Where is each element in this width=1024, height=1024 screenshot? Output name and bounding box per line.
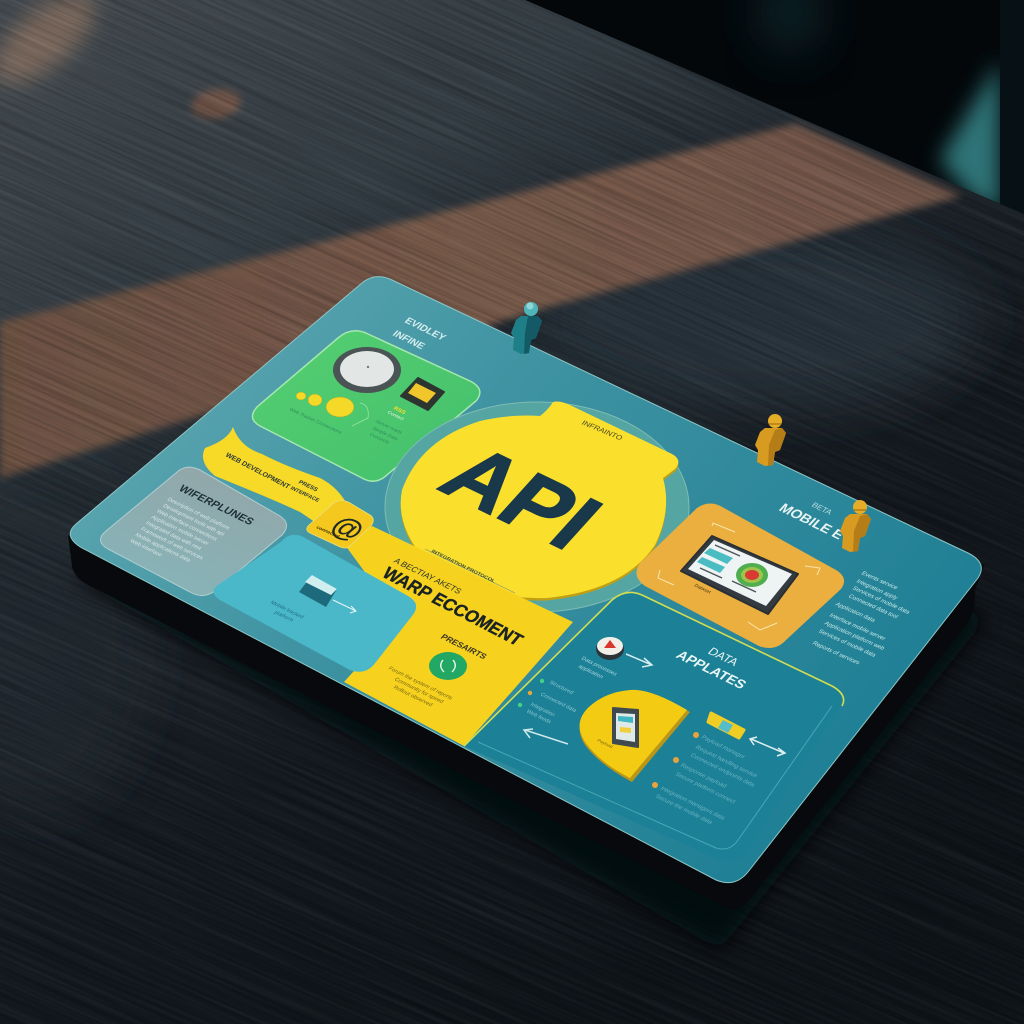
bullets right with text: Integration managers data [659, 786, 726, 822]
icon: @ badge: connected [315, 525, 341, 539]
heading: mobile: BETA [810, 501, 835, 517]
icon: tablet [681, 536, 798, 614]
panel: green features [252, 331, 480, 481]
ribbon: web development: INTERFACE [289, 486, 321, 504]
yellow half disc with phone: Payload [596, 738, 615, 749]
green panel text [288, 406, 407, 446]
panel: waterplanes glass [100, 467, 287, 596]
green panel text: Server reads [374, 419, 404, 436]
text block: right column: Services of mobile data [817, 629, 877, 659]
panel: waterplanes glass: Framework of web services [139, 527, 204, 561]
heading: top label: EVIDLEY [402, 316, 448, 343]
heading: top label: INFINE [390, 329, 427, 352]
bullets left: Web feeds [525, 709, 552, 725]
figure: gold person middle [755, 414, 786, 466]
ribbon: web development: PRESS [297, 480, 319, 493]
text block: right column: Interface mobile server [828, 613, 887, 642]
board shadow [70, 560, 985, 950]
bullets right with text [652, 732, 759, 826]
panel: light blue connector: Mobile tracked [269, 600, 305, 620]
icon: red alert button [596, 637, 624, 660]
panel: yellow development block: Community for speed [393, 677, 445, 705]
panel: yellow development block: INTEGRATION PROTOCOL [430, 549, 496, 584]
text block: right column: Application platform web [823, 621, 886, 652]
big API title: API [422, 429, 621, 566]
panel: waterplanes glass: Integrated data with rest [144, 521, 203, 552]
bullets right with text: Secure the mobile data [654, 794, 714, 826]
figure: teal person [511, 302, 542, 354]
green panel text: Contact [386, 410, 406, 422]
board side thickness [68, 535, 985, 909]
panel: yellow development block: Rollout observed [392, 685, 433, 708]
bullets right with text: Secure platform connect [674, 772, 737, 805]
API disc [401, 402, 678, 601]
arrow left [524, 729, 568, 744]
green panel text: Web Tracker Connections [288, 407, 344, 436]
text block: right column: Events service [860, 571, 899, 591]
panel: mobile orange [636, 504, 844, 648]
infographic board [70, 277, 981, 883]
heading: top label [390, 316, 448, 352]
light spot centre [189, 86, 243, 122]
panel: yellow development block: WARP ECCOMENT [378, 563, 528, 649]
panel: data applates [464, 592, 844, 862]
text block: right column: Services of mobile data [851, 586, 911, 616]
heading: data applates: APPLATES [673, 647, 750, 692]
icon: toggle pill [708, 713, 744, 738]
panel: waterplanes glass: Application mobile server [150, 515, 210, 547]
text block: right column: Connected data tool [847, 594, 899, 620]
text block: right column: Application data [834, 602, 877, 624]
ribbon: web development [203, 427, 350, 535]
panel: yellow development block: Forum the system of reports [387, 666, 454, 701]
bullets right with text: Request handling service [694, 745, 759, 779]
light spot top left [0, 0, 104, 92]
icon: yellow dots [296, 392, 354, 417]
green panel text: RSS [392, 406, 407, 416]
panel: waterplanes glass: WIFERPLUNES [176, 483, 256, 527]
icon: @ badge: @ [325, 510, 370, 547]
text block: right column: Integration apply [855, 579, 899, 601]
panel: yellow development block: PRESAIRTS [439, 632, 489, 661]
icon: dark card [401, 378, 444, 410]
icon: green circle [429, 652, 467, 680]
panel: waterplanes glass: Development tools with api [161, 503, 225, 537]
arrow double [750, 737, 785, 756]
arrow right [626, 654, 652, 667]
panel: waterplanes glass: Mobile applications data [134, 533, 192, 564]
halo behind API disc [385, 402, 689, 612]
yellow half disc with phone [580, 690, 690, 782]
figure: gold person right [840, 500, 871, 552]
wood grain dark [0, 0, 992, 752]
panel: yellow development block: A BECTIAY AKETS [392, 556, 464, 596]
icon: @ badge [307, 500, 373, 548]
ribbon: web development: WEB DEVELOPMENT [224, 452, 292, 491]
icon: gauge dial [333, 347, 401, 393]
icon: blue device with arrow [299, 575, 356, 613]
panel: yellow development block [344, 526, 573, 746]
panel: mobile orange: Dataset [693, 583, 713, 595]
green panel text: Simple Data [371, 426, 399, 442]
sunlight band on wood [0, 124, 962, 478]
bullets left: Connected data [539, 692, 578, 714]
icon: phone [613, 708, 638, 747]
bullets left [518, 679, 578, 725]
bullets right with text: Payload manager [700, 735, 746, 760]
panel: data applates: application [577, 664, 604, 680]
panel: light blue connector [213, 535, 416, 672]
text block: right column: Reports of services [811, 641, 861, 666]
heading: mobile: MOBILE E [776, 500, 848, 542]
heading: data applates: DATA [705, 645, 742, 669]
API disc: INFRAINTO [580, 419, 625, 442]
bullets left: Integration [529, 702, 556, 718]
text block: right column [811, 571, 911, 666]
bullets right with text: Response payload [679, 763, 727, 789]
panel: waterplanes glass: Web interface connections [155, 509, 218, 542]
panel: light blue connector: platform [273, 610, 295, 623]
panel: waterplanes glass: Web interface [128, 538, 163, 558]
panel: data applates: Data processes [580, 656, 618, 677]
bullets right with text: Connected endpoints data [689, 753, 756, 789]
bullets left: Structured [548, 680, 575, 696]
green panel text: Connects [368, 432, 391, 446]
panel: waterplanes glass: Description of web platform [166, 497, 231, 531]
